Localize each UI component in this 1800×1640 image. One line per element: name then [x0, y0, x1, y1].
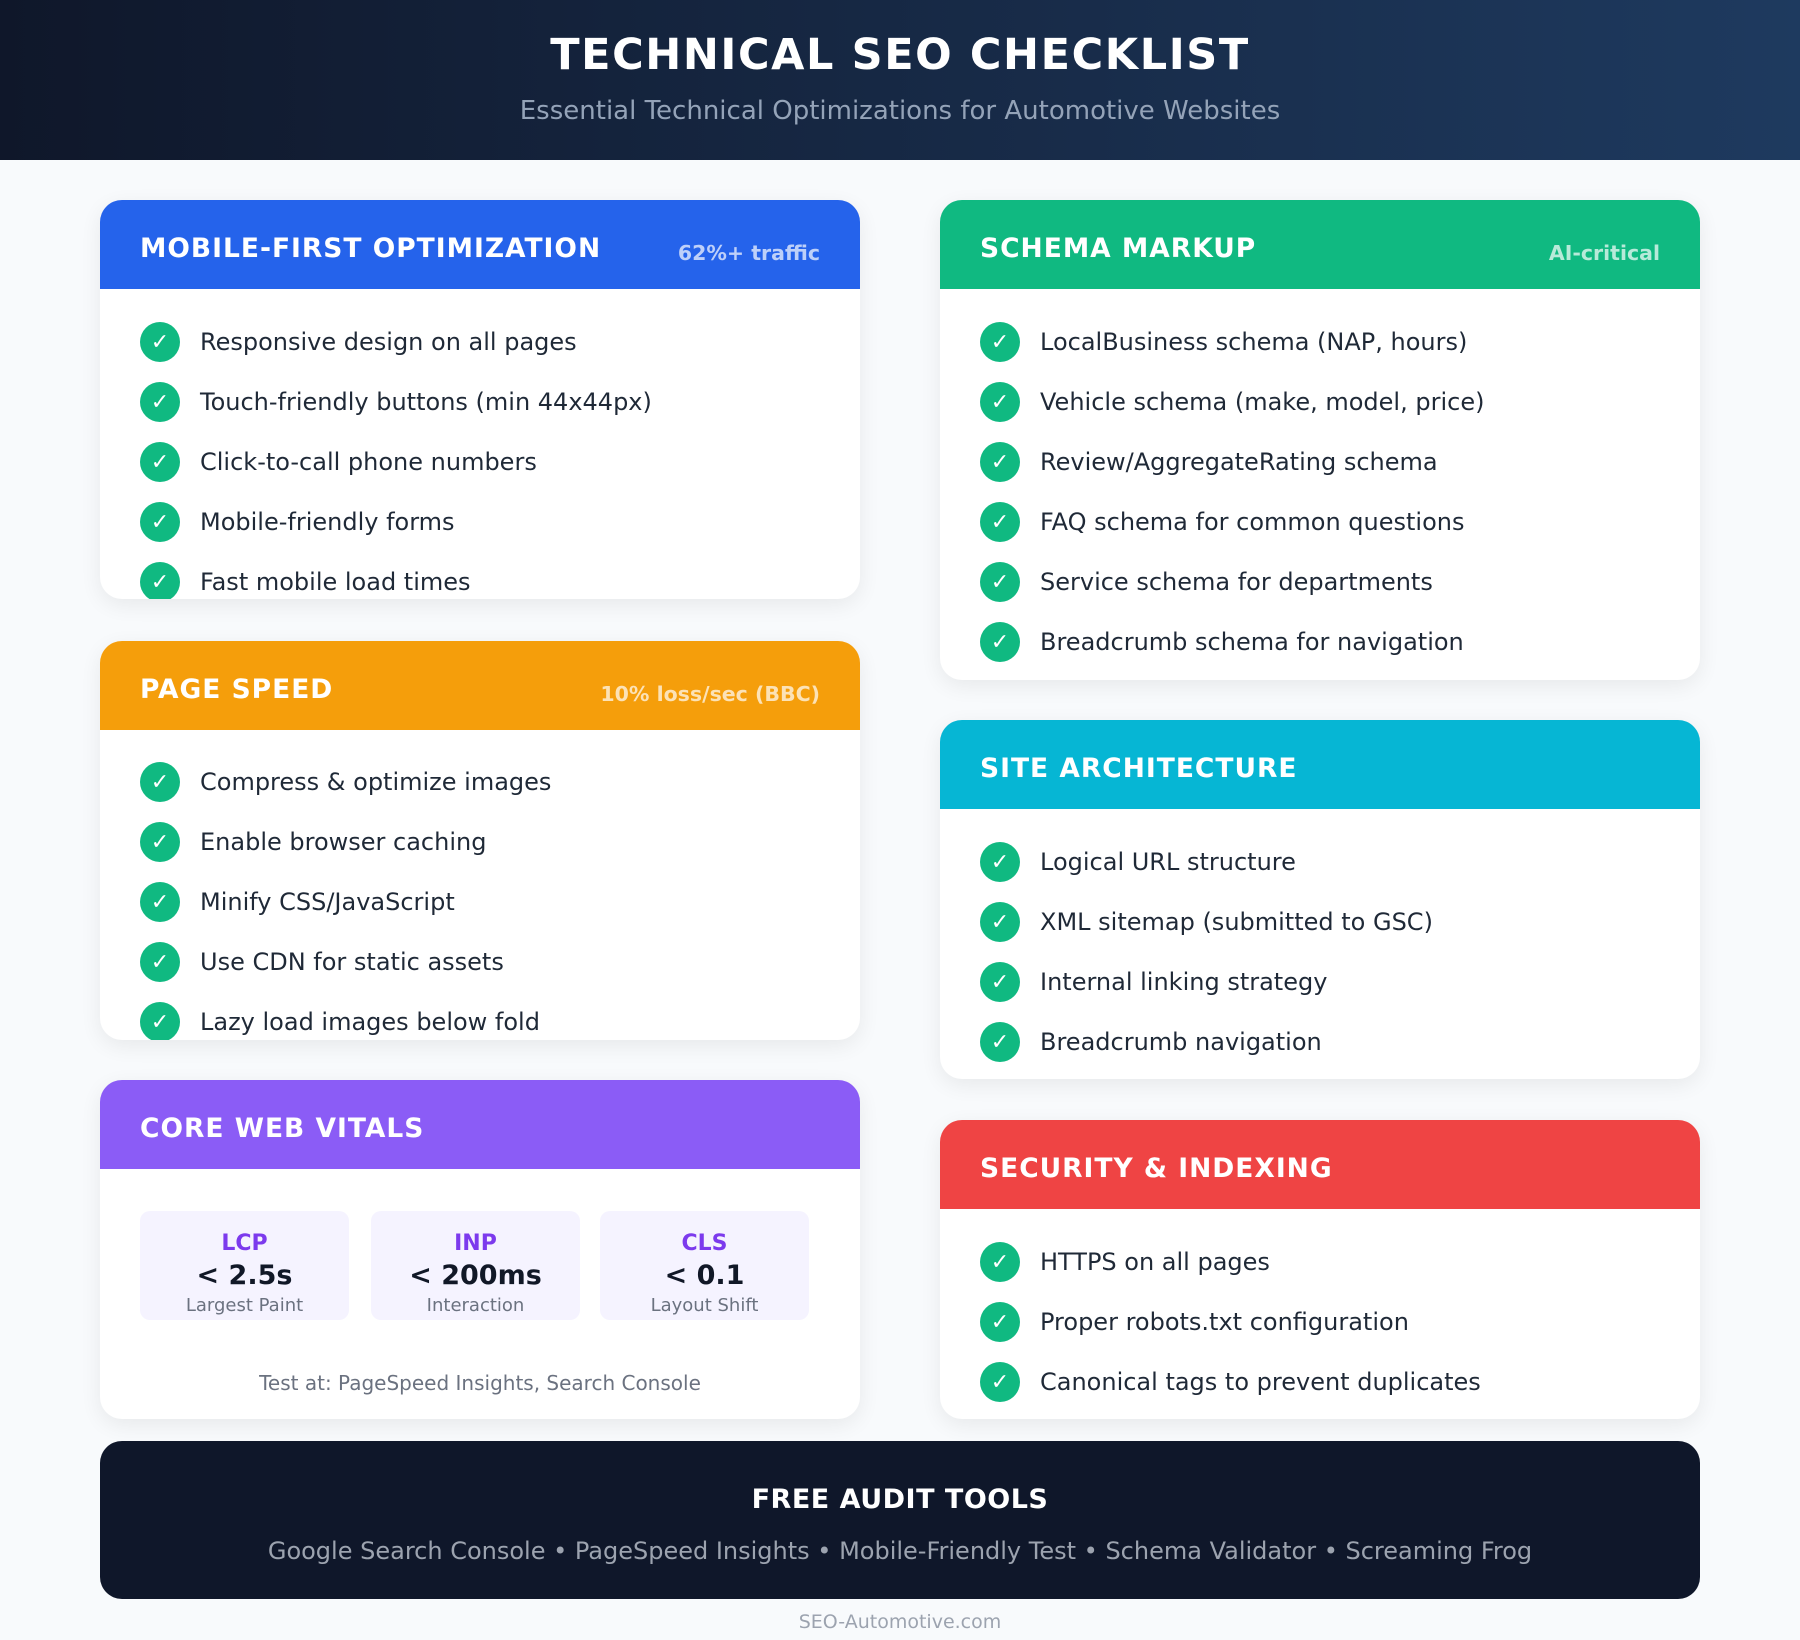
metric: INP: Interaction: [427, 1295, 524, 1316]
panel header: page speed: 10% loss/sec (BBC): [600, 682, 820, 706]
panel: mobile-first: [100, 200, 860, 599]
item: Breadcrumb navigation: [1040, 1028, 1322, 1056]
panel header: mobile-first: [100, 200, 860, 289]
panel: security & indexing: [940, 1120, 1700, 1419]
item: [140, 822, 486, 862]
item: ✓: [151, 950, 169, 974]
item: [980, 442, 1438, 482]
panel header: schema: AI-critical: [1549, 241, 1660, 265]
item: ✓: [151, 450, 169, 474]
metric: LCP: [140, 1211, 349, 1320]
item: ✓: [991, 390, 1009, 414]
item: ✓: [151, 890, 169, 914]
item: FAQ schema for common questions: [1040, 508, 1464, 536]
panel header: core web vitals: CORE WEB VITALS: [140, 1113, 424, 1144]
item: ✓: [991, 1310, 1009, 1334]
item: ✓: [991, 970, 1009, 994]
item: [980, 1242, 1270, 1282]
item: XML sitemap (submitted to GSC): [1040, 908, 1433, 936]
item: ✓: [151, 390, 169, 414]
panel header: site architecture: SITE ARCHITECTURE: [980, 753, 1297, 784]
footer panel: free audit tools: [100, 1441, 1700, 1599]
item: [140, 942, 504, 982]
item: ✓: [991, 850, 1009, 874]
metric: LCP: Largest Paint: [186, 1295, 303, 1316]
title: TECHNICAL SEO CHECKLIST: [550, 30, 1250, 80]
item: ✓: [151, 570, 169, 594]
metric: INP: [371, 1211, 580, 1320]
metric: LCP: LCP: [221, 1231, 268, 1256]
item: ✓: [991, 910, 1009, 934]
panel header: schema: [940, 200, 1700, 289]
item: ✓: [151, 510, 169, 534]
item: Compress & optimize images: [200, 768, 551, 796]
item: [980, 322, 1467, 362]
panel header: security: SECURITY & INDEXING: [980, 1153, 1333, 1184]
item: [980, 842, 1296, 882]
item: Vehicle schema (make, model, price): [1040, 388, 1484, 416]
panel header: page speed: PAGE SPEED: [140, 674, 333, 705]
item: ✓: [151, 330, 169, 354]
panel header: mobile-first: 62%+ traffic: [678, 241, 820, 265]
item: Responsive design on all pages: [200, 328, 577, 356]
item: ✓: [151, 770, 169, 794]
item: [980, 962, 1327, 1002]
panel header: mobile-first: MOBILE-FIRST OPTIMIZATION: [140, 233, 601, 264]
item: ✓: [991, 1030, 1009, 1054]
item: [140, 762, 551, 802]
item: Breadcrumb schema for navigation: [1040, 628, 1464, 656]
footer title: FREE AUDIT TOOLS: [752, 1484, 1048, 1515]
item: [140, 322, 577, 362]
metric: CLS: < 0.1: [665, 1260, 744, 1291]
item: [140, 442, 537, 482]
item: Minify CSS/JavaScript: [200, 888, 455, 916]
panel: page speed: [100, 641, 860, 1040]
item: ✓: [991, 630, 1009, 654]
item: Fast mobile load times: [200, 568, 471, 596]
metric: LCP: < 2.5s: [197, 1260, 292, 1291]
item: Click-to-call phone numbers: [200, 448, 537, 476]
metric: INP: < 200ms: [409, 1260, 542, 1291]
item: Review/AggregateRating schema: [1040, 448, 1438, 476]
item: Touch-friendly buttons (min 44x44px): [200, 388, 652, 416]
panel: schema markup: [940, 200, 1700, 680]
item: [980, 502, 1464, 542]
item: ✓: [991, 1370, 1009, 1394]
panel header: security: [940, 1120, 1700, 1209]
item: [140, 562, 471, 599]
item: ✓: [991, 510, 1009, 534]
item: [980, 622, 1464, 662]
tool list: Google Search Console • PageSpeed Insights • Mobile-Friendly Test • Schema Validator • Screaming Frog: [268, 1537, 1532, 1565]
panel header: site architecture: [940, 720, 1700, 809]
item: [980, 1022, 1322, 1062]
panel: site architecture: [940, 720, 1700, 1079]
header: [0, 0, 1800, 160]
item: HTTPS on all pages: [1040, 1248, 1270, 1276]
credit: SEO-Automotive.com: [799, 1611, 1001, 1633]
metric: CLS: CLS: [681, 1231, 728, 1256]
subtitle: Essential Technical Optimizations for Automotive Websites: [520, 96, 1280, 126]
item: [140, 1002, 540, 1040]
item: [980, 382, 1484, 422]
panel: core web vitals: [100, 1080, 860, 1419]
metric: INP: INP: [454, 1231, 497, 1256]
item: Proper robots.txt configuration: [1040, 1308, 1409, 1336]
item: Mobile-friendly forms: [200, 508, 455, 536]
panel header: page speed: [100, 641, 860, 730]
item: [140, 382, 652, 422]
item: Service schema for departments: [1040, 568, 1433, 596]
item: ✓: [991, 450, 1009, 474]
item: ✓: [991, 570, 1009, 594]
item: ✓: [151, 830, 169, 854]
item: Internal linking strategy: [1040, 968, 1327, 996]
metric: CLS: [600, 1211, 809, 1320]
item: ✓: [991, 330, 1009, 354]
item: [980, 1362, 1481, 1402]
panel header: schema: SCHEMA MARKUP: [980, 233, 1256, 264]
item: [980, 562, 1433, 602]
item: Lazy load images below fold: [200, 1008, 540, 1036]
item: [140, 882, 455, 922]
item: LocalBusiness schema (NAP, hours): [1040, 328, 1467, 356]
metric: CLS: Layout Shift: [651, 1295, 758, 1316]
item: ✓: [151, 1010, 169, 1034]
item: Logical URL structure: [1040, 848, 1296, 876]
panel header: core web vitals: [100, 1080, 860, 1169]
item: Enable browser caching: [200, 828, 486, 856]
item: [980, 1302, 1409, 1342]
item: [140, 502, 455, 542]
note: Test at: PageSpeed Insights, Search Console: [259, 1371, 701, 1395]
item: ✓: [991, 1250, 1009, 1274]
item: [980, 902, 1433, 942]
item: Use CDN for static assets: [200, 948, 504, 976]
item: Canonical tags to prevent duplicates: [1040, 1368, 1481, 1396]
